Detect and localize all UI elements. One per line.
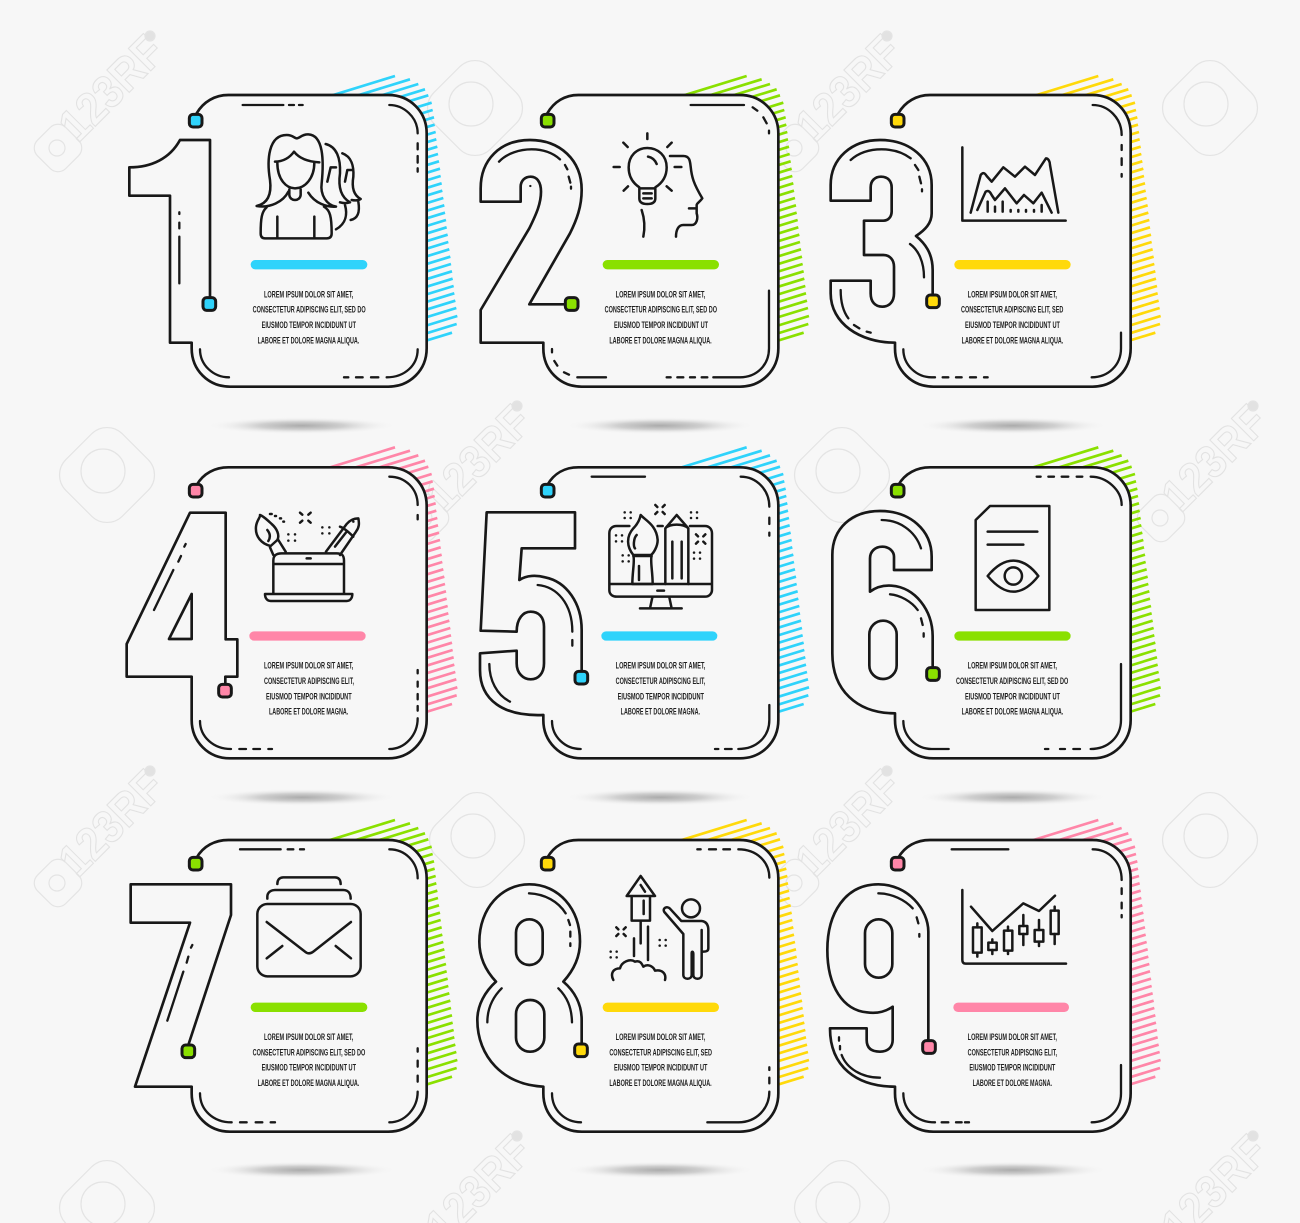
icon: women [257,134,361,238]
colour bar [251,260,367,269]
lorem text: LABORE ET DOLORE MAGNA ALIQUA. [962,335,1063,345]
numeral 3 and frame [831,95,1131,387]
colour bar [954,260,1071,269]
lorem text: LABORE ET DOLORE MAGNA. [269,707,348,717]
panel 4 [127,447,457,806]
lorem text: LOREM IPSUM DOLOR SIT AMET, [264,661,353,671]
lorem text [961,289,1063,345]
numeral 4 and frame [127,467,427,758]
lorem text [253,289,366,345]
yellow stripes [663,820,809,1102]
lorem text: LOREM IPSUM DOLOR SIT AMET, [616,289,705,299]
lorem text: EIUSMOD TEMPOR INCIDIDUNT [618,691,704,701]
lorem text [264,661,354,717]
lorem text: CONSECTETUR ADIPISCING ELIT, [616,676,705,686]
lorem text [609,1032,712,1088]
pink stripes [312,447,457,730]
colour bar [603,260,719,269]
panel 3 [831,76,1161,434]
lorem text: EIUSMOD TEMPOR INCIDIDUNT UT [614,320,708,330]
panel 9 [827,820,1161,1179]
lorem text: LOREM IPSUM DOLOR SIT AMET, [968,1032,1057,1042]
watermarks: 123RF [785,25,911,151]
lorem text: EIUSMOD TEMPOR INCIDIDUNT [266,691,352,701]
connector dots [891,484,939,680]
icon: document with eye [976,506,1049,610]
lorem text: LABORE ET DOLORE MAGNA ALIQUA. [609,335,712,345]
lorem text [956,661,1068,717]
ground shadow [918,1161,1108,1179]
icon: area chart [962,147,1066,221]
watermarks: 123RF [415,395,541,521]
connector dots [182,857,202,1058]
lorem text: LABORE ET DOLORE MAGNA ALIQUA. [962,707,1063,717]
colour bar [603,1003,719,1012]
lorem text: CONSECTETUR ADIPISCING ELIT, [264,676,354,686]
lorem text: LOREM IPSUM DOLOR SIT AMET, [968,661,1057,671]
numeral 7 and frame [131,840,427,1132]
connector dots [541,484,588,684]
lorem text: LOREM IPSUM DOLOR SIT AMET, [616,1032,705,1042]
colour bar [251,1003,367,1012]
watermarks: 123RF [48,25,174,151]
lorem text: CONSECTETUR ADIPISCING ELIT, SED DO [253,1047,365,1057]
lorem text: LABORE ET DOLORE MAGNA ALIQUA. [609,1078,712,1088]
icon: firework rocket and person [611,876,708,980]
watermarks: 123RF [785,760,911,886]
panel 1 [129,76,457,434]
lorem text: LOREM IPSUM DOLOR SIT AMET, [264,1032,353,1042]
numeral 8 and frame [477,840,778,1132]
lorem text: CONSECTETUR ADIPISCING ELIT, SED DO [956,676,1068,686]
panel 2 [481,76,809,434]
colour bar [953,1003,1069,1012]
icon: candlestick chart [962,890,1066,964]
lorem text: LABORE ET DOLORE MAGNA. [973,1078,1052,1088]
numeral 9 and frame [827,840,1131,1132]
icon: light bulb and head [614,133,702,237]
green stripes [312,820,457,1102]
colour bar [601,631,717,641]
lorem text: LABORE ET DOLORE MAGNA ALIQUA. [258,335,359,345]
connector dots [891,114,939,308]
lorem text: LABORE ET DOLORE MAGNA. [621,707,700,717]
lorem text: LOREM IPSUM DOLOR SIT AMET, [264,289,353,299]
lorem text: EIUSMOD TEMPOR INCIDIDUNT UT [262,320,356,330]
lorem text [616,661,705,717]
connector dots [541,857,587,1057]
numeral 6 and frame [832,467,1131,758]
lorem text [605,289,717,345]
icon: mail stack [257,877,361,976]
green stripes [663,76,809,358]
connector dots [891,857,935,1053]
lorem text: CONSECTETUR ADIPISCING ELIT, [968,1047,1057,1057]
connector dots [189,484,231,697]
connector dots [541,114,578,310]
icon: laptop with brush and pencil [256,513,359,601]
pink stripes [1015,820,1161,1102]
lorem text: CONSECTETUR ADIPISCING ELIT, SED DO [253,305,366,315]
lorem text [968,1032,1057,1088]
lorem text [253,1032,365,1088]
lorem text: EIUSMOD TEMPOR INCIDIDUNT [969,1063,1056,1073]
lorem text: CONSECTETUR ADIPISCING ELIT, SED [961,305,1063,315]
panel 6 [832,447,1161,806]
lorem text: EIUSMOD TEMPOR INCIDIDUNT UT [614,1063,708,1073]
colour bar [954,631,1071,641]
lorem text: LABORE ET DOLORE MAGNA ALIQUA. [258,1078,359,1088]
ground shadow [918,789,1108,806]
lorem text: EIUSMOD TEMPOR INCIDIDUNT UT [965,320,1060,330]
lorem text: EIUSMOD TEMPOR INCIDIDUNT UT [262,1063,356,1073]
icon: monitor with brush and pencil [609,505,712,608]
lorem text: LOREM IPSUM DOLOR SIT AMET, [968,289,1057,299]
green stripes [1015,447,1161,730]
numeral 5 and frame [480,467,778,758]
ground shadow [565,789,755,806]
lorem text: CONSECTETUR ADIPISCING ELIT, SED [609,1047,712,1057]
connector dots [189,114,216,310]
panel 5 [480,447,809,806]
ground shadow [565,1161,755,1179]
yellow stripes [1015,76,1161,358]
lorem text: LOREM IPSUM DOLOR SIT AMET, [616,661,705,671]
ground shadow [565,417,755,434]
panel 7 [131,820,457,1179]
ground shadow [918,417,1108,434]
watermarks: 123RF [1151,395,1277,521]
watermarks: 123RF [48,760,174,886]
panel 8 [477,820,809,1179]
blue stripes [663,447,809,730]
lorem text: EIUSMOD TEMPOR INCIDIDUNT UT [965,691,1060,701]
colour bar [249,631,366,641]
ground shadow [207,789,397,806]
numeral 1 and frame [129,95,427,387]
ground shadow [207,417,397,434]
ground shadow [207,1161,397,1179]
numeral 2 and frame [481,95,778,387]
blue stripes [312,76,457,358]
lorem text: CONSECTETUR ADIPISCING ELIT, SED DO [605,305,717,315]
